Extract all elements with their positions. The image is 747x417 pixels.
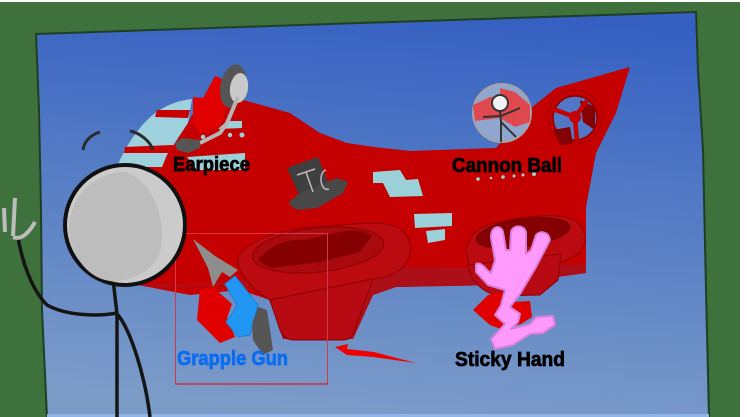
label: Cannon Ball: Cannon Ball xyxy=(452,155,562,177)
highlight box xyxy=(175,234,328,384)
figure hand xyxy=(4,198,35,238)
icon: sticky hand xyxy=(476,226,555,349)
rear fan xyxy=(548,90,602,145)
figure eyebrows xyxy=(83,131,153,150)
icon: red gem xyxy=(473,292,532,329)
icon: earpiece xyxy=(175,62,250,153)
window panes xyxy=(187,121,452,243)
portholes xyxy=(201,132,536,181)
label: Earpiece: Earpiece xyxy=(173,154,250,176)
right engine xyxy=(466,213,585,296)
icon: grapple gun xyxy=(193,239,273,355)
label: Sticky Hand: Sticky Hand xyxy=(455,349,565,371)
figure body xyxy=(18,237,150,417)
arrow xyxy=(335,344,416,363)
label: Grapple Gun: Grapple Gun xyxy=(177,348,288,370)
hull shadow xyxy=(133,264,586,339)
stick figure xyxy=(4,131,185,417)
figure head xyxy=(65,165,185,285)
red airship xyxy=(118,67,630,340)
icon: cannon ball xyxy=(473,84,531,142)
ship hull xyxy=(120,67,630,339)
icon: top hat xyxy=(287,157,348,210)
ship glass tail xyxy=(118,99,192,173)
left engine xyxy=(238,221,410,340)
